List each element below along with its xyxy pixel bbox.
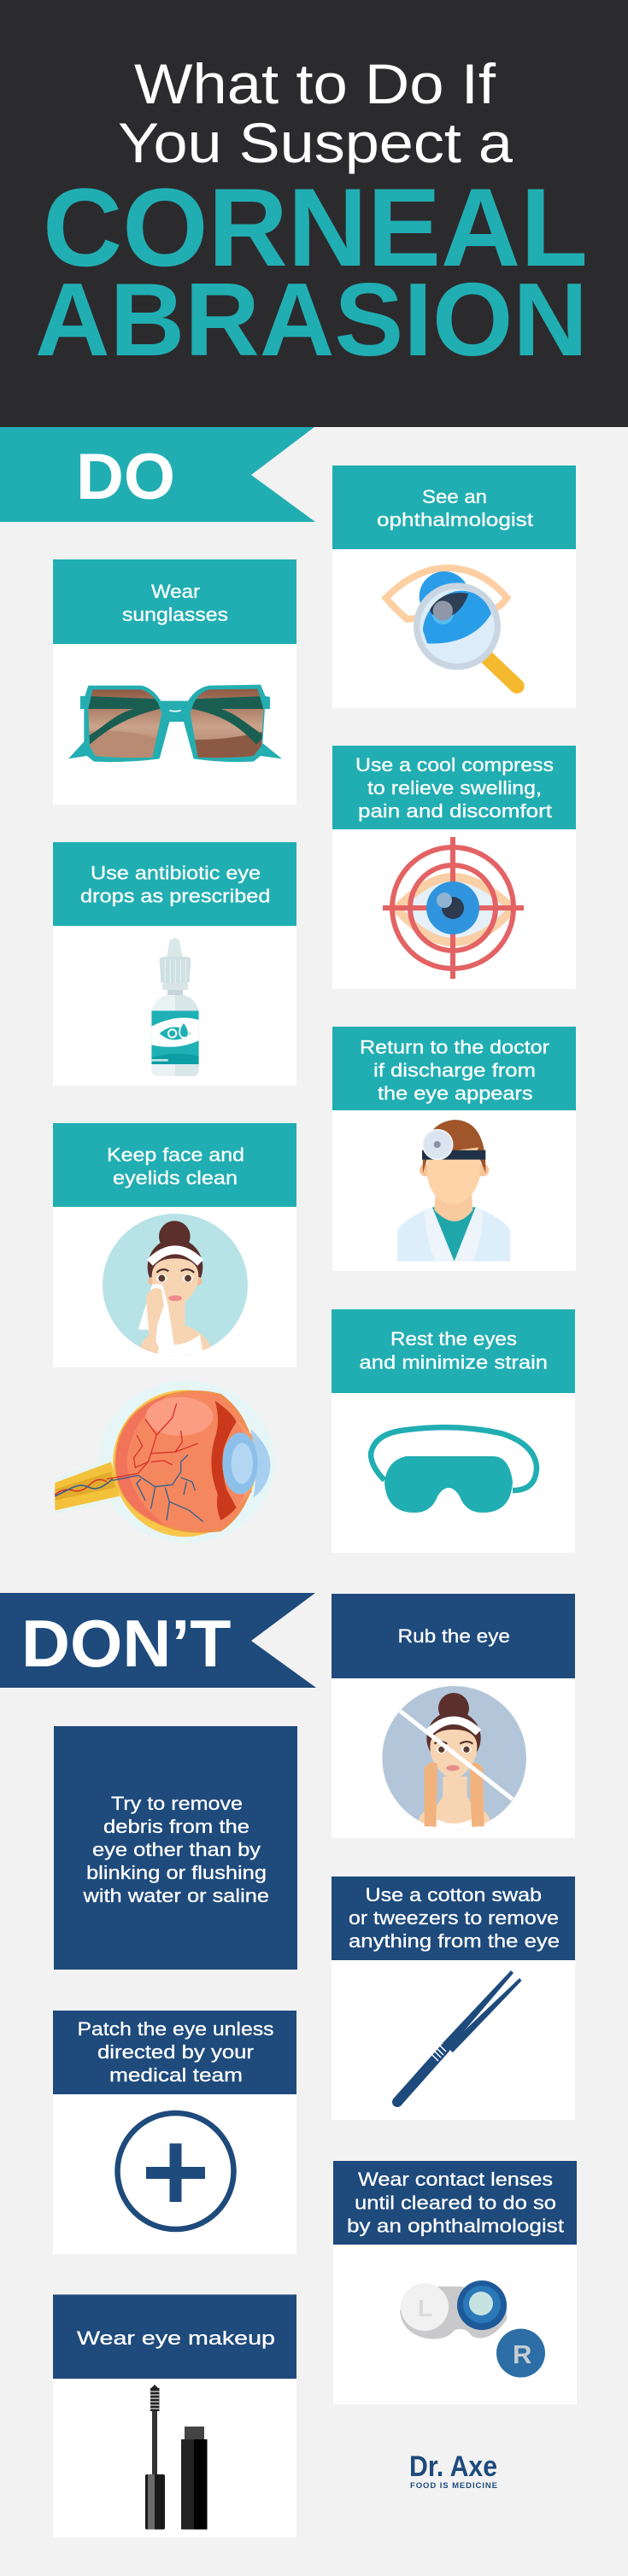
panel: try to remove debris: [54, 1726, 297, 1970]
panel: use a cotton swab or tweezers: anything from the eye: [349, 1930, 560, 1952]
banner: DON'T: DON’T: [21, 1606, 231, 1681]
panel: see an ophthalmologist: ophthalmologist: [377, 509, 533, 530]
icon: eye under magnifying glass: [386, 568, 517, 686]
panel: use a cool compress: [332, 746, 576, 989]
panel: antibiotic eye drops: drops as prescribed: [80, 885, 270, 907]
panel: antibiotic eye drops: [53, 842, 296, 1086]
panel: wear sunglasses: Wear: [151, 581, 200, 602]
panel: return to the doctor: [332, 1027, 576, 1271]
panel: wear contact lenses: [333, 2161, 577, 2404]
panel: try to remove debris: blinking or flushing: [86, 1862, 267, 1883]
panel: keep face and eyelids clean: eyelids clean: [113, 1167, 238, 1188]
icon: sleep mask: [371, 1427, 537, 1513]
icon: woman wiping face with towel: [103, 1214, 248, 1358]
panel: keep face and eyelids clean: [53, 1123, 296, 1367]
icon: woman rubbing eyes crossed out: [382, 1686, 526, 1830]
icon: eye anatomy: [55, 1381, 275, 1543]
icon: tweezers: [397, 1970, 521, 2102]
panel: see an ophthalmologist: See an: [422, 486, 487, 507]
panel: patch the eye: medical team: [109, 2064, 243, 2086]
panel: rub the eye: Rub the eye: [398, 1625, 510, 1647]
panel: rest the eyes: Rest the eyes: [390, 1328, 517, 1349]
panel: try to remove debris: eye other than by: [92, 1839, 261, 1860]
banner: DO: DO: [76, 441, 175, 513]
panel: rub the eye: [332, 1594, 575, 1838]
panel: wear sunglasses: [53, 559, 296, 805]
panel: return to the doctor: the eye appears: [378, 1083, 533, 1104]
panel: wear contact lenses: by an ophthalmologist: [347, 2216, 564, 2236]
logo: Dr. Axe: Dr. Axe: [409, 2450, 497, 2483]
panel: antibiotic eye drops: Use antibiotic eye: [91, 863, 261, 883]
panel: use a cool compress: to relieve swelling,: [367, 777, 542, 799]
panel: use a cotton swab or tweezers: [332, 1876, 575, 2120]
panel: see an ophthalmologist: [332, 465, 576, 708]
panel: patch the eye: [53, 2011, 296, 2254]
icon: doctor with head mirror: [397, 1120, 510, 1262]
icon: eye drop bottle: [151, 938, 199, 1076]
panel: use a cool compress: Use a cool compress: [355, 754, 554, 776]
panel: try to remove debris: debris from the: [103, 1816, 249, 1837]
panel: use a cotton swab or tweezers: Use a cotton swab: [366, 1884, 542, 1906]
panel: use a cotton swab or tweezers: or tweezers to remove: [349, 1907, 559, 1929]
title: [0, 0, 628, 427]
panel: return to the doctor: if discharge from: [373, 1059, 536, 1081]
panel: rest the eyes: [332, 1309, 575, 1553]
panel: return to the doctor: Return to the doctor: [360, 1037, 549, 1057]
panel: wear contact lenses: Wear contact lenses: [358, 2169, 553, 2190]
icon: contact lens case: L: [418, 2295, 432, 2321]
icon: mascara wand and tube: [145, 2385, 207, 2530]
icon: eye in target crosshair: [383, 837, 524, 979]
title: You Suspect a: [118, 111, 513, 174]
icon: sunglasses: [68, 685, 282, 762]
title: CORNEAL: [43, 165, 588, 290]
icon: contact lens case: R: [513, 2339, 531, 2369]
title: What to Do If: [134, 52, 496, 115]
panel: wear sunglasses: sunglasses: [122, 604, 228, 625]
panel: wear contact lenses: until cleared to do so: [355, 2192, 556, 2214]
banner: DO: [0, 427, 315, 522]
logo: Dr. Axe: FOOD IS MEDICINE: [410, 2481, 497, 2491]
icon: contact lens case: [400, 2280, 545, 2378]
icon: plus in circle: [118, 2113, 234, 2229]
panel: wear eye makeup: [53, 2294, 296, 2538]
panel: patch the eye: Patch the eye unless: [77, 2018, 273, 2040]
panel: try to remove debris: with water or saline: [82, 1885, 269, 1906]
banner: DON'T: [0, 1593, 316, 1688]
panel: patch the eye: directed by your: [97, 2041, 254, 2063]
title: ABRASION: [35, 261, 588, 378]
panel: try to remove debris: Try to remove: [111, 1793, 243, 1814]
panel: rest the eyes: and minimize strain: [359, 1351, 548, 1373]
panel: use a cool compress: pain and discomfort: [358, 800, 552, 822]
panel: keep face and eyelids clean: Keep face and: [107, 1144, 244, 1165]
panel: wear eye makeup: Wear eye makeup: [77, 2327, 275, 2349]
